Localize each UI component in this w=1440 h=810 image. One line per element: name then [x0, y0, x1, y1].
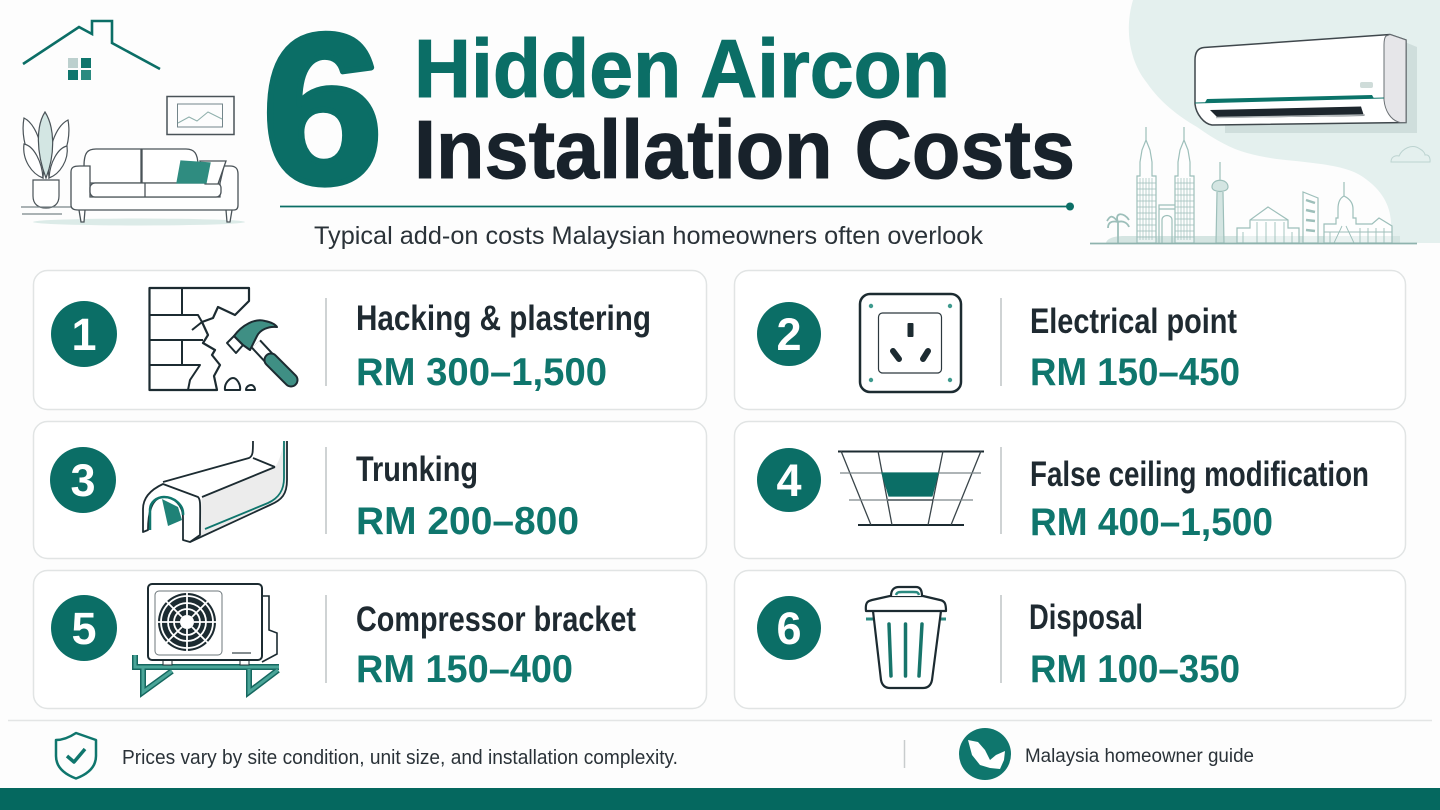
- panel: electrical point: [734, 270, 1406, 410]
- subtitle: Typical add-on costs Malaysian homeowners often overlook: [314, 222, 984, 250]
- divider: [1000, 298, 1002, 386]
- footer note: Prices vary by site condition, unit size, and installation complexity.: [122, 747, 678, 769]
- title line 2: Installation Costs: [414, 103, 1075, 196]
- price: RM 300–1,500: [356, 351, 607, 394]
- panel: compressor bracket: [34, 570, 706, 708]
- number badge 4: [757, 448, 821, 512]
- price: RM 100–350: [1030, 648, 1240, 691]
- number badge 6: [757, 596, 821, 660]
- label: Hacking & plastering: [356, 299, 651, 338]
- icon: outdoor compressor on bracket: [135, 584, 279, 692]
- title rule: [280, 202, 1074, 210]
- label: Disposal: [1029, 598, 1143, 637]
- number badge 2: 2: [776, 309, 802, 360]
- illustration: wall air conditioner: [1195, 34, 1417, 133]
- illustration: house roof: [23, 21, 160, 80]
- icon: rubbish bin: [866, 587, 946, 688]
- label: Trunking: [356, 450, 478, 489]
- icon: shield check: [56, 733, 96, 778]
- panel: false ceiling modification: [734, 422, 1406, 558]
- illustration: framed picture: [167, 96, 234, 134]
- icon: ceiling panel: [838, 451, 984, 525]
- icon: cable trunking: [143, 441, 287, 542]
- divider: [325, 298, 327, 386]
- panel: disposal: [734, 570, 1406, 708]
- divider: [325, 447, 327, 534]
- price: RM 150–450: [1030, 351, 1240, 394]
- background blob: top right: [1129, 0, 1440, 243]
- illustration: sofa: [33, 149, 245, 226]
- illustration: cloud: [1391, 147, 1430, 162]
- price: RM 400–1,500: [1030, 501, 1273, 544]
- number badge 1: 1: [71, 309, 97, 360]
- divider: [1000, 595, 1002, 683]
- price: RM 150–400: [356, 648, 573, 691]
- footer divider: [904, 740, 906, 768]
- icon: wall socket: [860, 294, 961, 392]
- number badge 5: [51, 595, 117, 661]
- footer rule: [8, 720, 1432, 722]
- footer guide label: Malaysia homeowner guide: [1025, 746, 1254, 767]
- panel: hacking and plastering: [34, 270, 706, 410]
- illustration: potted plant: [21, 112, 71, 214]
- price: RM 200–800: [356, 500, 579, 543]
- icon: Malaysia map badge: [959, 728, 1011, 780]
- number badge 1: [51, 301, 117, 367]
- panel: trunking: [34, 422, 706, 558]
- divider: [1000, 447, 1002, 534]
- icon: broken wall and hammer: [149, 288, 291, 390]
- title line 1: Hidden Aircon: [414, 22, 950, 115]
- number badge 2: [757, 302, 821, 366]
- number badge 4: 4: [776, 455, 802, 506]
- footer bar: [0, 788, 1440, 810]
- number badge 5: 5: [71, 603, 97, 654]
- illustration: Kuala Lumpur skyline: [1090, 127, 1417, 244]
- number badge 3: [50, 447, 116, 513]
- label: Compressor bracket: [356, 600, 636, 639]
- divider: [325, 595, 327, 683]
- number badge 3: 3: [70, 455, 96, 506]
- label: Electrical point: [1030, 302, 1237, 341]
- number badge 6: 6: [776, 603, 802, 654]
